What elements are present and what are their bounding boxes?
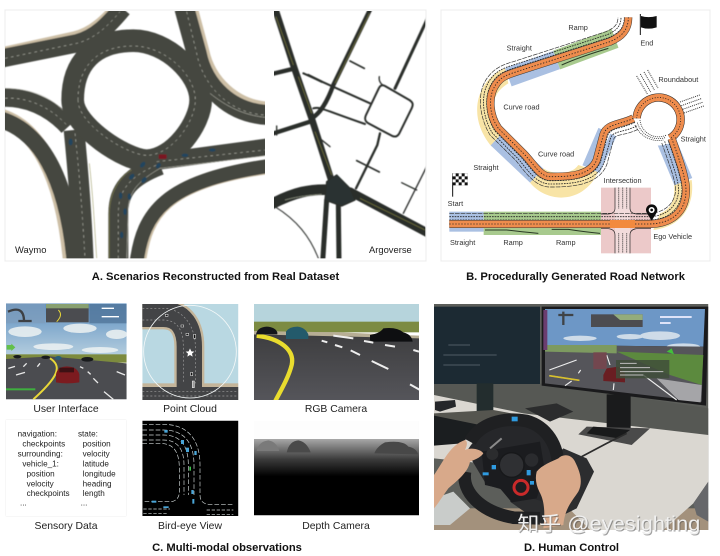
panel: sensory data list: checkpoints	[22, 440, 65, 449]
panel: C multi-modal observations	[6, 303, 420, 532]
panel: sensory data list: longitude	[83, 469, 116, 478]
monitor stand	[578, 394, 650, 457]
panel: sensory data list: navigation:	[18, 430, 57, 439]
image: user interface	[6, 303, 127, 399]
intersection roads	[601, 188, 651, 253]
panel: sensory data list: checkpoints	[27, 489, 70, 498]
label: Waymo: Waymo	[15, 244, 46, 255]
colored road block zones	[449, 38, 692, 253]
panel: sensory data list: surrounding:	[18, 450, 63, 459]
heading: panel C caption: C. Multi-modal observations	[152, 542, 302, 554]
wheel base	[510, 448, 594, 525]
panel: sensory data list	[6, 420, 126, 516]
panel: sensory data list: ...	[20, 499, 27, 508]
panel: sensory data list: vehicle_1:	[22, 460, 59, 469]
map: Waymo roundabout	[2, 8, 268, 262]
panel: D human control photo	[434, 304, 708, 536]
panel: sensory data list: velocity	[83, 450, 111, 459]
road labels: Straight	[473, 163, 499, 172]
panel: sensory data list: latitude	[83, 460, 109, 469]
panel: sensory data list: position	[83, 440, 111, 449]
road labels: Straight	[507, 43, 532, 52]
road labels: Ramp	[503, 238, 523, 247]
image: bird-eye view	[142, 421, 238, 516]
road labels: Straight	[450, 238, 475, 247]
right monitor	[542, 307, 708, 406]
label: RGB Camera: RGB Camera	[305, 404, 367, 415]
heading: panel D caption: D. Human Control	[524, 542, 619, 554]
road labels: End	[640, 39, 653, 48]
watermark: 知乎 @eyesighting	[518, 513, 701, 536]
hands	[434, 440, 581, 528]
panel: sensory data list: length	[83, 489, 105, 498]
watermark: 知乎 @eyesighting	[517, 512, 700, 535]
panel: sensory data list: state:	[78, 430, 98, 439]
road labels: Ego Vehicle	[653, 232, 692, 241]
panel: sensory data list: position	[27, 469, 55, 478]
steering wheel	[465, 417, 558, 518]
image: RGB camera	[254, 304, 420, 402]
road labels: Intersection	[604, 176, 642, 185]
label: Point Cloud: Point Cloud	[163, 404, 217, 415]
left monitor	[434, 307, 573, 446]
panel: sensory data list: heading	[83, 479, 112, 488]
road labels: Roundabout	[658, 75, 698, 84]
label: Argoverse: Argoverse	[369, 244, 412, 255]
panel: sensory data list: ...	[81, 499, 87, 508]
road labels	[448, 23, 706, 247]
heading: panel B caption: B. Procedurally Generated Road Network	[466, 271, 686, 283]
map: Argoverse road network	[272, 8, 428, 262]
roundabout spokes and ring	[635, 70, 705, 141]
image: point cloud	[139, 304, 238, 400]
image: depth camera	[254, 439, 419, 516]
road labels: Curve road	[538, 149, 574, 158]
label: User Interface: User Interface	[33, 404, 99, 415]
label: Bird-eye View: Bird-eye View	[158, 521, 222, 532]
road labels: Straight	[681, 134, 706, 143]
panel: A scenarios reconstructed from real dataset	[2, 8, 428, 262]
panel: sensory data list: velocity	[27, 479, 55, 488]
heading: panel A caption: A. Scenarios Reconstructed from Real Dataset	[92, 271, 339, 283]
label: Depth Camera: Depth Camera	[302, 521, 370, 532]
road labels: Start	[448, 199, 463, 208]
road labels: Ramp	[556, 238, 576, 247]
label: Sensory Data: Sensory Data	[35, 521, 98, 532]
panel: B procedurally generated road network	[441, 10, 710, 261]
icon: end flag	[640, 14, 657, 35]
road labels: Ramp	[568, 23, 588, 32]
road lanes	[449, 17, 686, 233]
road labels: Curve road	[503, 102, 540, 111]
icon: ego vehicle pin	[646, 204, 657, 221]
icon: start flag	[453, 173, 468, 197]
